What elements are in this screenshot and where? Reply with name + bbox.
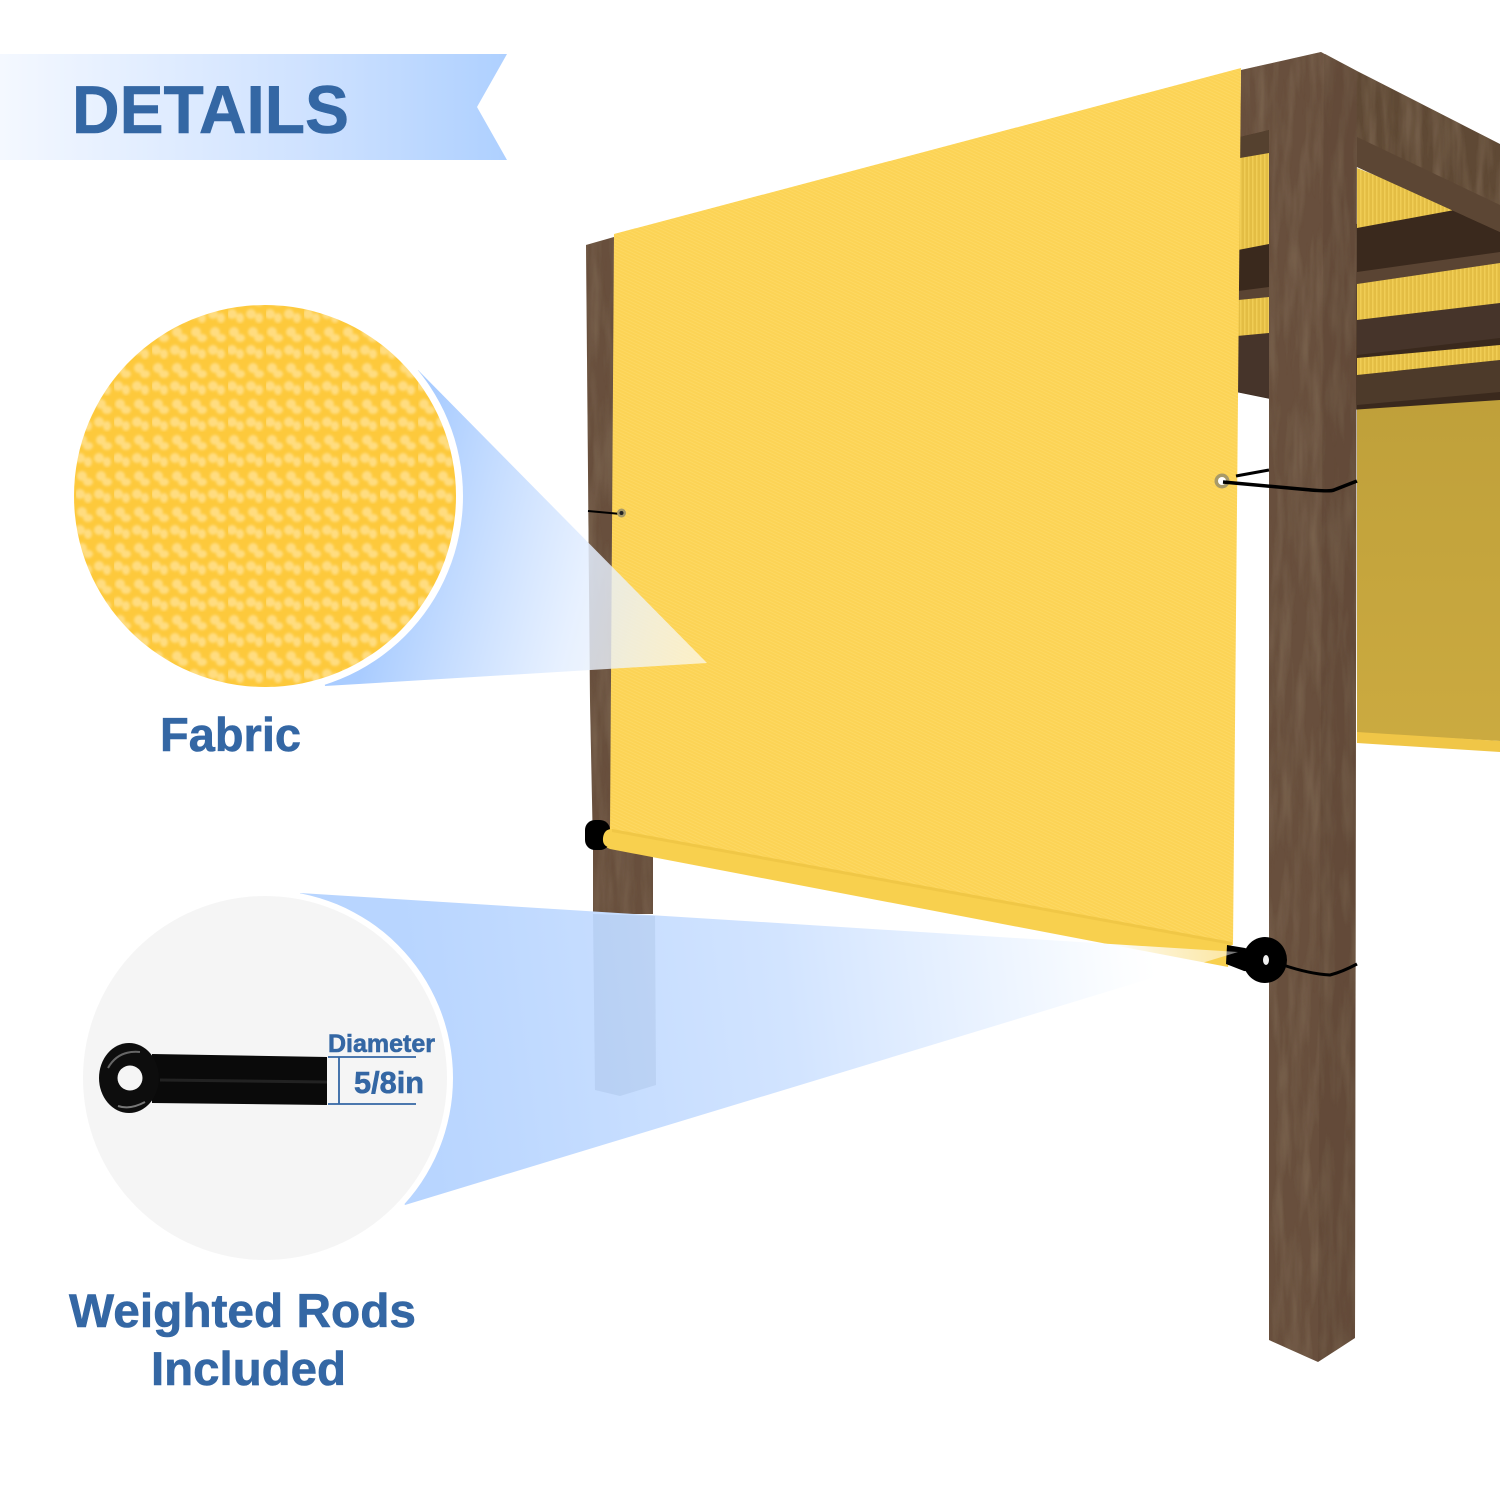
fabric label: Fabric bbox=[160, 708, 301, 761]
back curtain rod bbox=[1357, 732, 1500, 752]
rod photo bbox=[99, 1043, 327, 1113]
weighted rod detail circle bbox=[77, 890, 453, 1266]
back curtain bbox=[1357, 392, 1500, 741]
weighted rods label bbox=[69, 1284, 416, 1395]
weighted rods label: Weighted Rods bbox=[69, 1284, 416, 1337]
back structure: right curtain, rails and shade strips bbox=[1236, 125, 1500, 752]
right rod end cap bbox=[1226, 937, 1287, 983]
diameter dimension lines bbox=[328, 1057, 416, 1104]
yellow roof strips bbox=[1237, 153, 1500, 375]
diameter label: Diameter bbox=[328, 1030, 435, 1058]
callout beam: fabric bbox=[300, 370, 707, 686]
bottom rod of shade bbox=[603, 829, 1232, 967]
rod top shadow bbox=[612, 829, 1232, 945]
left post seen through beam bbox=[593, 914, 656, 1096]
fabric shade panel bbox=[610, 68, 1241, 945]
left post bbox=[586, 237, 653, 914]
title: DETAILS bbox=[72, 72, 349, 148]
grommet and cord: left bbox=[588, 508, 626, 518]
fabric detail circle bbox=[67, 298, 463, 694]
diameter value: 5/8in bbox=[354, 1065, 424, 1100]
left rod end cap bbox=[585, 820, 610, 850]
top beam side bbox=[1325, 54, 1500, 232]
right post bbox=[1240, 52, 1357, 1362]
weighted rods label: Included bbox=[151, 1342, 346, 1395]
dark roof rails bbox=[1236, 125, 1500, 410]
callout beam: weighted rod bbox=[300, 893, 1238, 1205]
wooden pergola frame bbox=[586, 52, 1500, 1362]
grommet and cord: right bbox=[1214, 470, 1357, 491]
banner bbox=[0, 54, 507, 160]
right post side shade bbox=[1318, 54, 1357, 1362]
cord: lower right bbox=[1283, 964, 1357, 975]
